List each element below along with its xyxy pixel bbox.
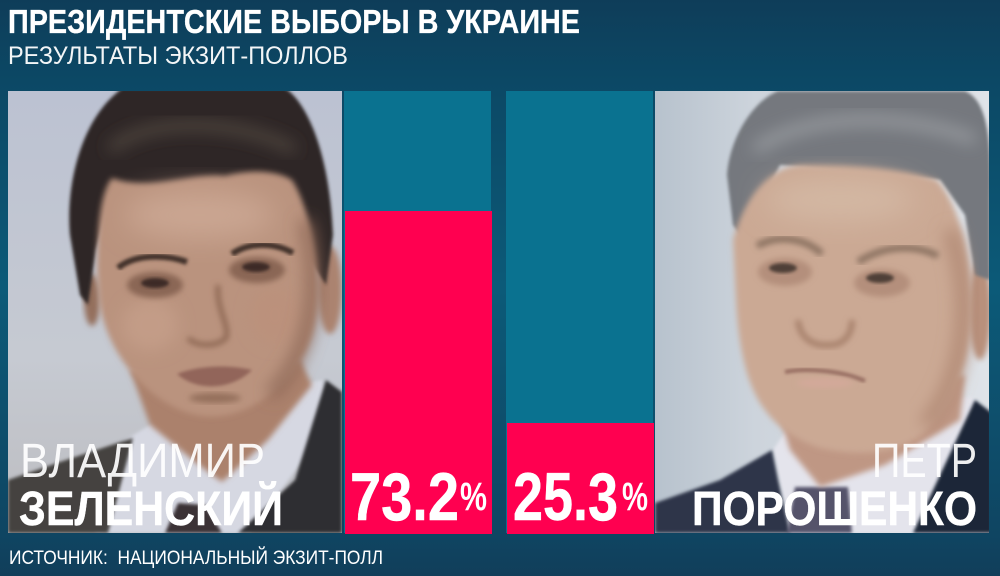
panel: Zelensky portrait: [8, 88, 342, 533]
left eye socket: [758, 258, 812, 286]
left brow: [757, 239, 822, 254]
ear left: [84, 274, 100, 326]
left eye: [141, 278, 169, 288]
subtitle: РЕЗУЛЬТАТЫ ЭКЗИТ-ПОЛЛОВ: [8, 42, 348, 70]
tie: [787, 487, 852, 533]
left brow: [118, 257, 187, 268]
jacket right: [238, 380, 342, 533]
hair mass: [69, 88, 333, 305]
right eye: [866, 273, 894, 283]
right eye socket: [229, 257, 285, 283]
bar: Zelensky 73.2: [345, 211, 492, 534]
mouth: [785, 370, 865, 381]
panel: left bar track: [344, 91, 491, 533]
bar: Poroshenko 25.3: [507, 423, 654, 534]
source note: ИСТОЧНИК: НАЦИОНАЛЬНЫЙ ЭКЗИТ-ПОЛЛ: [9, 547, 383, 569]
label: Zelensky surname: ЗЕЛЕНСКИЙ: [19, 481, 283, 536]
shirt: [773, 433, 950, 533]
ear: [969, 260, 991, 360]
value: 25.3 percent: %: [622, 475, 648, 519]
value: 73.2 percent: 73.2: [350, 459, 459, 535]
tie: [165, 503, 222, 533]
value: 73.2 percent: %: [460, 475, 487, 519]
forehead highlight: [125, 191, 275, 239]
hair: [727, 91, 990, 280]
mouth: [177, 367, 252, 386]
left eye: [769, 263, 797, 273]
right eye: [242, 262, 270, 272]
lower lip: [797, 378, 853, 388]
chin shadow: [189, 393, 241, 403]
label: Vladimir first name: ВЛАДИМИР: [20, 435, 265, 488]
hair highlight: [755, 120, 975, 150]
neck: [130, 360, 312, 482]
face: [97, 172, 318, 416]
right brow: [858, 248, 938, 262]
neck: [775, 375, 965, 487]
label: Petr first name: ПЕТР: [872, 435, 977, 488]
value: 25.3 percent: 25.3: [513, 459, 618, 535]
jacket left: [655, 450, 790, 533]
cheek highlight: [132, 310, 168, 340]
nose shadow: [798, 320, 852, 345]
jacket left: [8, 438, 133, 533]
jacket right: [913, 400, 992, 533]
right eye socket: [854, 269, 910, 297]
right cheek shade: [925, 230, 964, 425]
left eye socket: [127, 272, 183, 298]
panel: Poroshenko portrait: [655, 91, 992, 533]
hair texture: [110, 126, 295, 150]
panel: right bar track: [506, 91, 653, 533]
face: [733, 165, 971, 453]
ear right: [318, 246, 342, 334]
title: ПРЕЗИДЕНТСКИЕ ВЫБОРЫ В УКРАИНЕ: [8, 3, 580, 40]
face side shadow: [270, 220, 313, 395]
shirt: [95, 380, 332, 533]
nose shadow: [188, 285, 227, 345]
right brow: [232, 245, 293, 254]
forehead highlight: [765, 178, 915, 222]
